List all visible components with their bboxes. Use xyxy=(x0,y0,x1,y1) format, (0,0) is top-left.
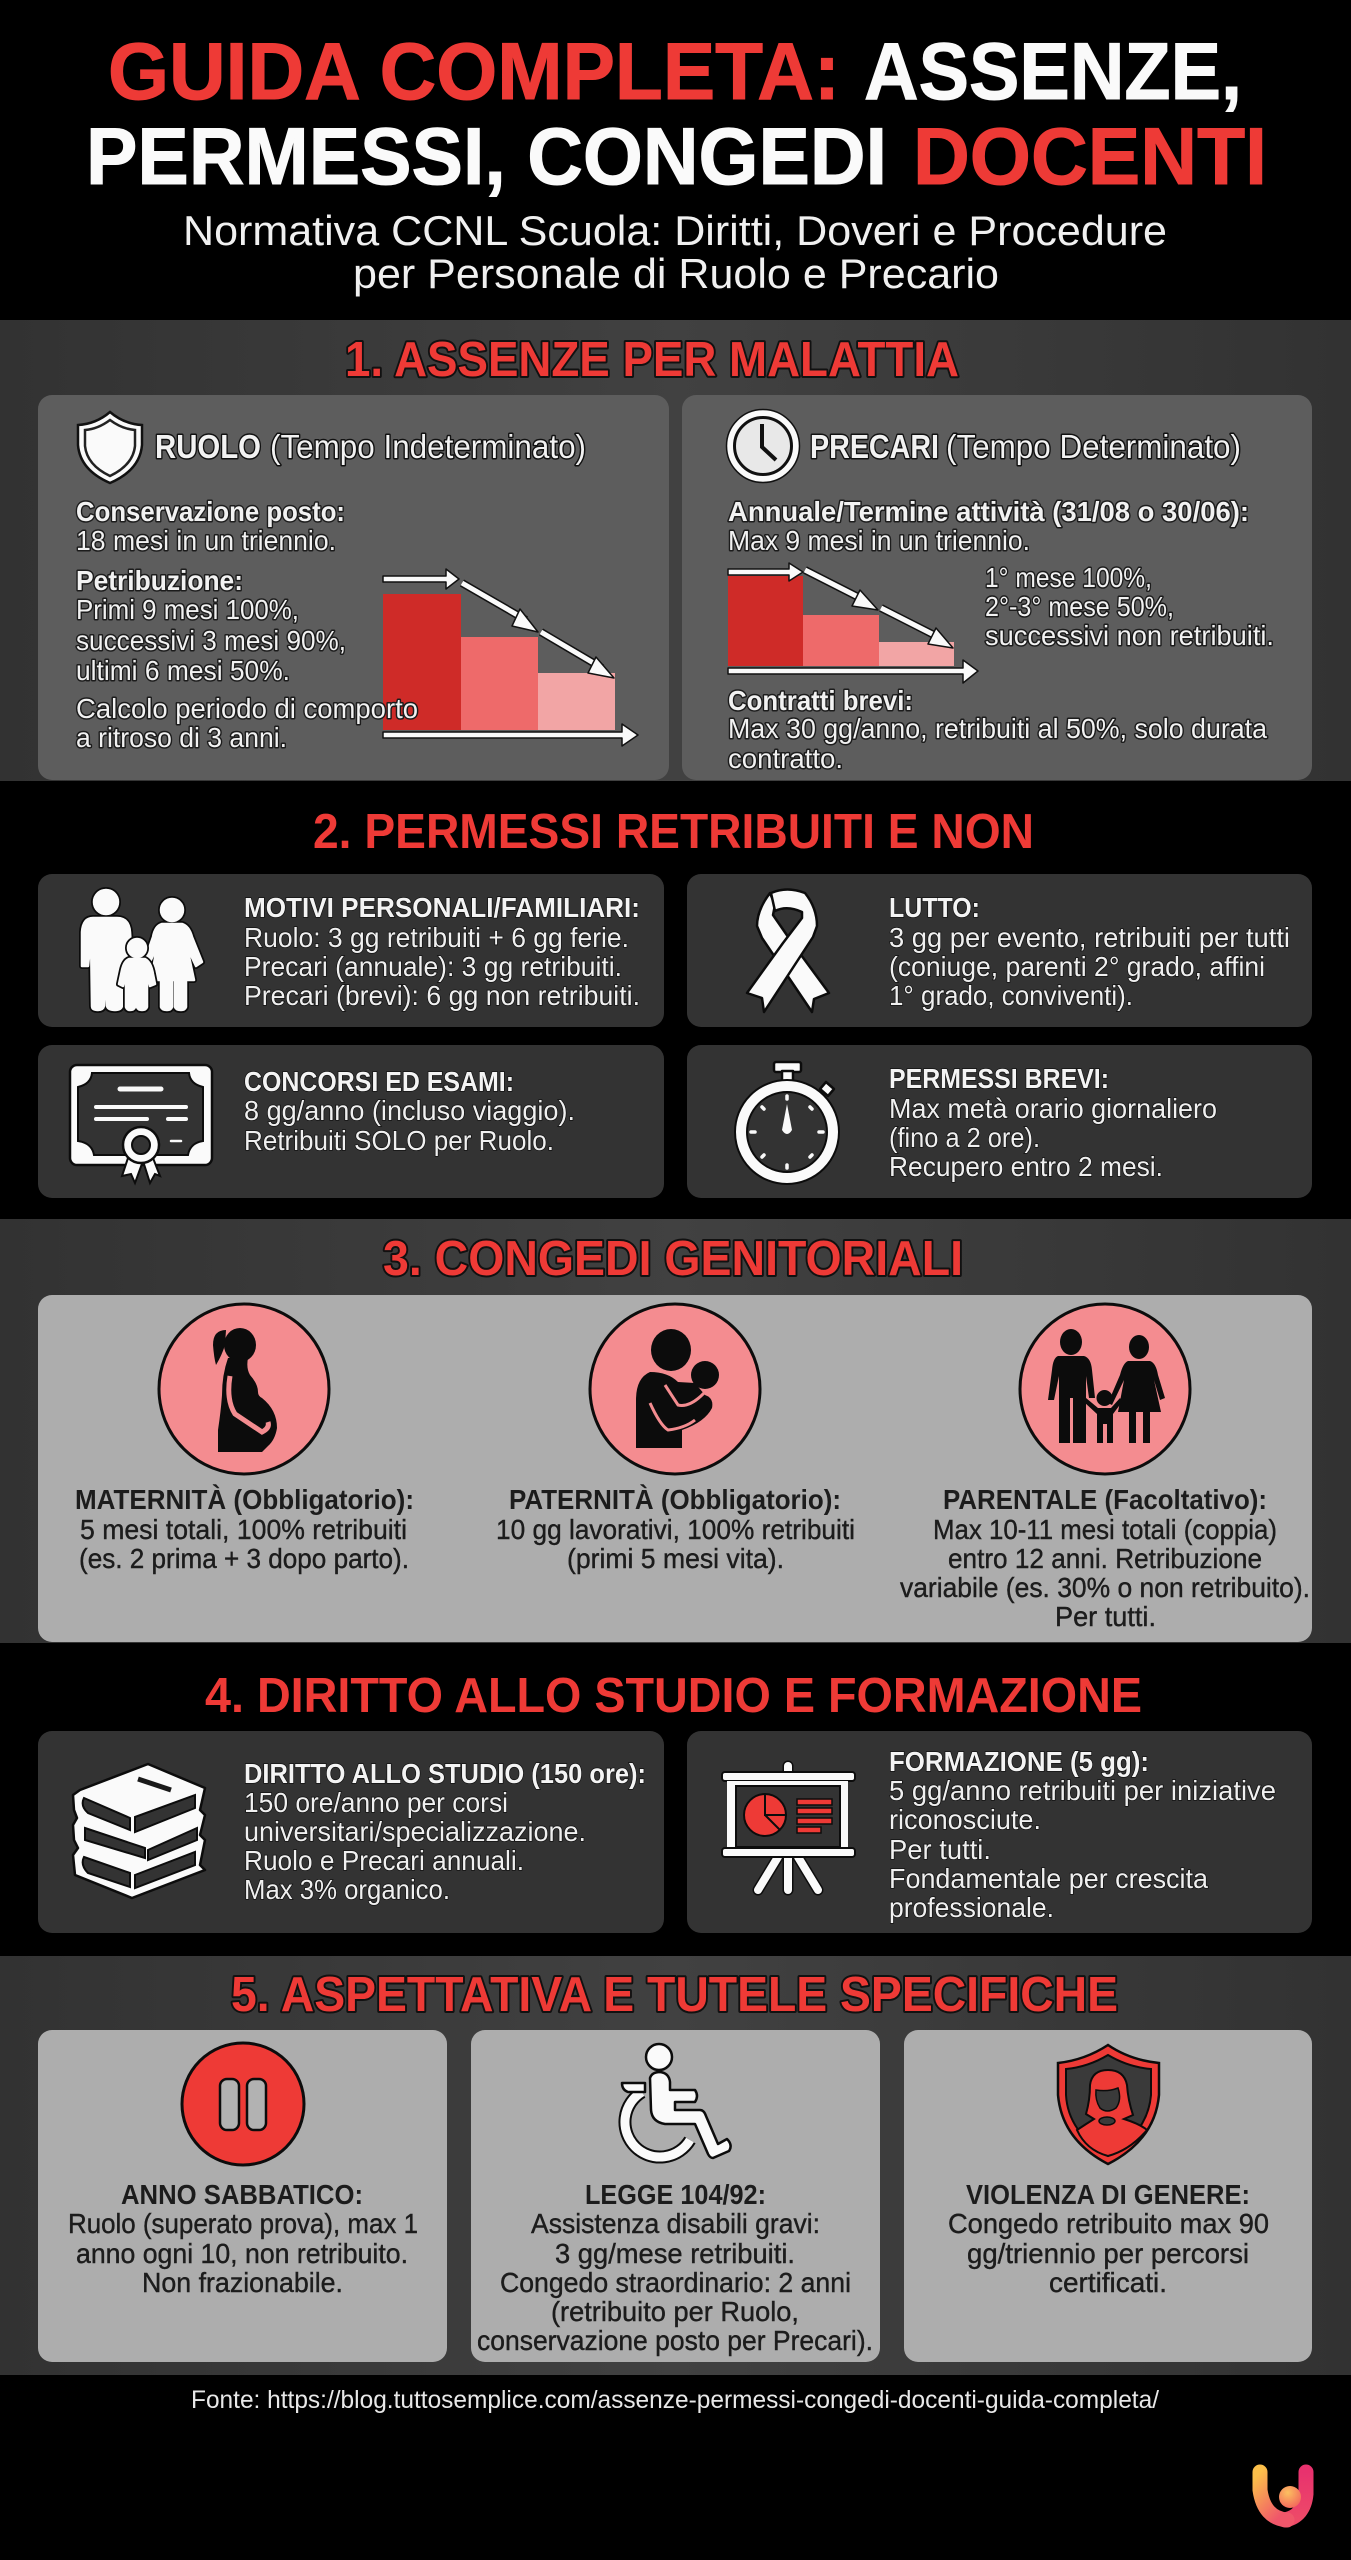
title: ASSENZE, xyxy=(864,27,1242,117)
precari heading: PRECARI xyxy=(810,428,939,465)
panel: legge 104 xyxy=(471,2030,880,2362)
legge text: 3 gg/mese retribuiti. xyxy=(555,2238,795,2269)
panel: permessi brevi xyxy=(687,1045,1312,1198)
icon: maternita xyxy=(159,1304,329,1474)
section 1: assenze per malattia xyxy=(0,320,1351,781)
panel: congedi xyxy=(38,1295,1312,1642)
ruolo note xyxy=(76,693,418,753)
icon: presentation board xyxy=(722,1766,855,1890)
panel: motivi personali xyxy=(38,874,664,1027)
lutto text: 3 gg per evento, retribuiti per tutti xyxy=(889,922,1290,953)
diritto text: 150 ore/anno per corsi xyxy=(244,1787,508,1818)
parentale text: entro 12 anni. Retribuzione xyxy=(948,1543,1262,1574)
heading 4: 4. DIRITTO ALLO STUDIO E FORMAZIONE xyxy=(205,1669,1142,1723)
concorsi text: 8 gg/anno (incluso viaggio). xyxy=(244,1095,575,1126)
icon: paternita xyxy=(590,1304,760,1474)
icon: wheelchair xyxy=(622,2044,731,2158)
lutto text: 1° grado, conviventi). xyxy=(889,980,1133,1011)
violenza text: VIOLENZA DI GENERE: xyxy=(966,2179,1250,2210)
contratti brevi: Max 30 gg/anno, retribuiti al 50%, solo durata xyxy=(728,713,1267,744)
paternita text: (primi 5 mesi vita). xyxy=(567,1543,784,1574)
parentale text: Max 10-11 mesi totali (coppia) xyxy=(933,1514,1277,1545)
heading 1: 1. ASSENZE PER MALATTIA xyxy=(345,333,959,387)
motivi text: Precari (brevi): 6 gg non retribuiti. xyxy=(244,980,640,1011)
icon: clock xyxy=(726,410,800,482)
motivi text: Ruolo: 3 gg retribuiti + 6 gg ferie. xyxy=(244,922,629,953)
permessi brevi text: Recupero entro 2 mesi. xyxy=(889,1151,1163,1182)
legge text: conservazione posto per Precari). xyxy=(477,2325,873,2356)
source footer: Fonte: https://blog.tuttosemplice.com/assenze-permessi-congedi-docenti-guida-completa/ xyxy=(191,2386,1159,2414)
formazione text: professionale. xyxy=(889,1892,1054,1923)
contratti brevi: Contratti brevi: xyxy=(728,685,913,716)
diritto text: Max 3% organico. xyxy=(244,1874,450,1905)
legge text: Congedo straordinario: 2 anni xyxy=(500,2267,851,2298)
maternita text: 5 mesi totali, 100% retribuiti xyxy=(80,1514,407,1545)
parentale text: PARENTALE (Facoltativo): xyxy=(943,1484,1267,1515)
panel: diritto allo studio xyxy=(38,1731,664,1933)
panel: lutto xyxy=(687,874,1312,1027)
section 5: aspettativa xyxy=(0,1956,1351,2375)
icon: logo xyxy=(1260,2472,1306,2520)
legge text: (retribuito per Ruolo, xyxy=(551,2296,799,2327)
heading 2: 2. PERMESSI RETRIBUITI E NON xyxy=(313,805,1034,859)
icon: family xyxy=(82,890,202,1010)
precari heading xyxy=(810,428,1241,465)
permessi brevi text: Max metà orario giornaliero xyxy=(889,1093,1217,1124)
parentale text xyxy=(900,1484,1310,1632)
ruolo text: successivi 3 mesi 90%, xyxy=(76,625,346,656)
title: PERMESSI, CONGEDI xyxy=(86,112,887,202)
panel: precari xyxy=(682,395,1312,780)
panel: formazione xyxy=(687,1731,1312,1933)
precari percentuali: successivi non retribuiti. xyxy=(985,620,1274,651)
precari percentuali: 1° mese 100%, xyxy=(985,562,1152,593)
subtitle xyxy=(183,207,1167,297)
concorsi text: CONCORSI ED ESAMI: xyxy=(244,1066,514,1097)
sabbatico text: Ruolo (superato prova), max 1 xyxy=(68,2208,418,2239)
precari percentuali xyxy=(985,562,1274,651)
sabbatico text xyxy=(68,2179,418,2298)
motivi text xyxy=(244,892,640,1011)
precari text xyxy=(728,496,1249,556)
formazione text: 5 gg/anno retribuiti per iniziative xyxy=(889,1775,1276,1806)
motivi text: MOTIVI PERSONALI/FAMILIARI: xyxy=(244,892,640,923)
ruolo text xyxy=(76,496,346,686)
formazione text: Per tutti. xyxy=(889,1834,991,1865)
ruolo text: Primi 9 mesi 100%, xyxy=(76,594,299,625)
legge text xyxy=(477,2179,873,2356)
panel: anno sabbatico xyxy=(38,2030,447,2362)
parentale text: Per tutti. xyxy=(1055,1601,1156,1632)
paternita text xyxy=(496,1484,855,1574)
section 2: permessi xyxy=(38,805,1312,1198)
section 3: congedi genitoriali xyxy=(0,1219,1351,1643)
violenza text xyxy=(948,2179,1269,2298)
contratti brevi: contratto. xyxy=(728,743,843,774)
concorsi text: Retribuiti SOLO per Ruolo. xyxy=(244,1125,554,1156)
title: DOCENTI xyxy=(913,112,1267,202)
permessi brevi text xyxy=(889,1063,1217,1182)
sabbatico text: Non frazionabile. xyxy=(142,2267,343,2298)
icon: shield xyxy=(78,412,142,483)
ruolo text: Petribuzione: xyxy=(76,565,243,596)
contratti brevi xyxy=(728,685,1267,774)
heading 5: 5. ASPETTATIVA E TUTELE SPECIFICHE xyxy=(231,1968,1118,2022)
subtitle: per Personale di Ruolo e Precario xyxy=(353,250,999,297)
permessi brevi text: PERMESSI BREVI: xyxy=(889,1063,1109,1094)
panel: violenza di genere xyxy=(904,2030,1312,2362)
icon: protected woman shield xyxy=(1058,2045,1159,2164)
sabbatico text: ANNO SABBATICO: xyxy=(121,2179,363,2210)
formazione text: FORMAZIONE (5 gg): xyxy=(889,1746,1149,1777)
legge text: LEGGE 104/92: xyxy=(585,2179,766,2210)
permessi brevi text: (fino a 2 ore). xyxy=(889,1122,1040,1153)
title xyxy=(86,27,1267,202)
ruolo text: ultimi 6 mesi 50%. xyxy=(76,655,290,686)
icon: pause xyxy=(182,2043,304,2165)
diritto text: Ruolo e Precari annuali. xyxy=(244,1845,524,1876)
precari heading: (Tempo Determinato) xyxy=(946,428,1241,465)
paternita text: 10 gg lavorativi, 100% retribuiti xyxy=(496,1514,855,1545)
precari text: Max 9 mesi in un triennio. xyxy=(728,525,1030,556)
formazione text: riconosciute. xyxy=(889,1804,1041,1835)
parentale text: variabile (es. 30% o non retribuito). xyxy=(900,1572,1310,1603)
panel: concorsi xyxy=(38,1045,664,1198)
diritto text: universitari/specializzazione. xyxy=(244,1816,586,1847)
paternita text: PATERNITÀ (Obbligatorio): xyxy=(509,1484,841,1515)
violenza text: gg/triennio per percorsi xyxy=(967,2238,1249,2269)
icon: certificate xyxy=(70,1065,212,1183)
lutto text: (coniuge, parenti 2° grado, affini xyxy=(889,951,1265,982)
heading 3: 3. CONGEDI GENITORIALI xyxy=(383,1232,963,1286)
ruolo text: Conservazione posto: xyxy=(76,496,345,527)
precari text: Annuale/Termine attività (31/08 o 30/06): xyxy=(728,496,1249,527)
title: GUIDA COMPLETA: xyxy=(108,27,840,117)
section 4: diritto allo studio xyxy=(38,1669,1312,1933)
sabbatico text: anno ogni 10, non retribuito. xyxy=(76,2238,408,2269)
maternita text: MATERNITÀ (Obbligatorio): xyxy=(75,1484,414,1515)
diritto text xyxy=(244,1758,646,1905)
ruolo heading: RUOLO xyxy=(155,428,261,465)
icon: books xyxy=(73,1764,205,1898)
chart: retribuzione ruolo xyxy=(383,569,638,746)
lutto text: LUTTO: xyxy=(889,892,980,923)
legge text: Assistenza disabili gravi: xyxy=(531,2208,820,2239)
icon: parentale xyxy=(1020,1304,1190,1474)
lutto text xyxy=(889,892,1290,1011)
icon: stopwatch xyxy=(735,1062,839,1184)
maternita text xyxy=(75,1484,414,1574)
diritto text: DIRITTO ALLO STUDIO (150 ore): xyxy=(244,1758,646,1789)
ruolo note: Calcolo periodo di comporto xyxy=(76,693,418,724)
subtitle: Normativa CCNL Scuola: Diritti, Doveri e Procedure xyxy=(183,207,1167,254)
panel: ruolo xyxy=(38,395,669,780)
ruolo text: 18 mesi in un triennio. xyxy=(76,525,336,556)
icon: ribbon xyxy=(747,890,829,1012)
ruolo note: a ritroso di 3 anni. xyxy=(76,722,287,753)
motivi text: Precari (annuale): 3 gg retribuiti. xyxy=(244,951,622,982)
violenza text: Congedo retribuito max 90 xyxy=(948,2208,1269,2239)
ruolo heading: (Tempo Indeterminato) xyxy=(270,428,586,465)
chart: retribuzione precari xyxy=(728,563,978,683)
precari percentuali: 2°-3° mese 50%, xyxy=(985,591,1174,622)
concorsi text xyxy=(244,1066,575,1156)
formazione text: Fondamentale per crescita xyxy=(889,1863,1208,1894)
maternita text: (es. 2 prima + 3 dopo parto). xyxy=(79,1543,409,1574)
formazione text xyxy=(889,1746,1276,1923)
violenza text: certificati. xyxy=(1049,2267,1167,2298)
